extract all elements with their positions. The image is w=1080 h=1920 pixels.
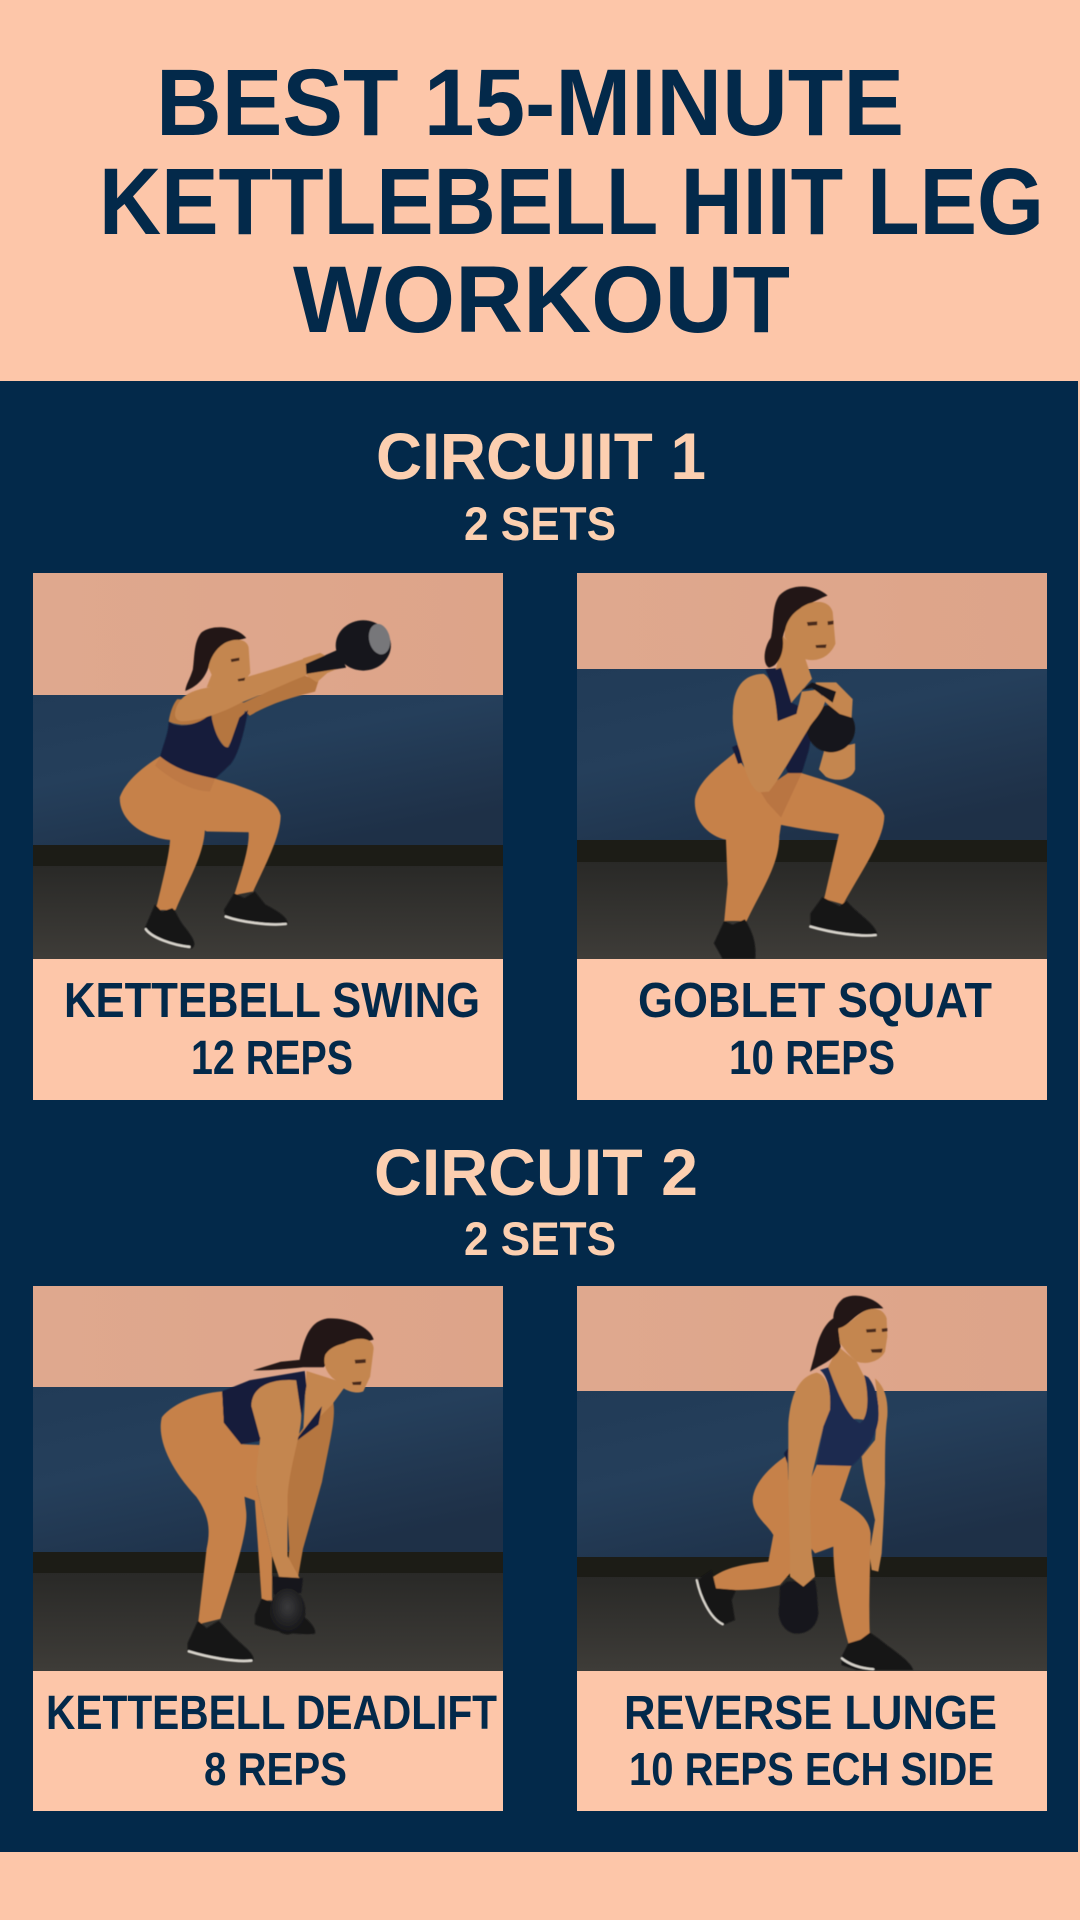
kettlebell: [270, 1576, 305, 1634]
title: BEST 15-MINUTE: [156, 50, 904, 156]
title: WORKOUT: [293, 247, 790, 353]
panel: reverse lunge: [577, 1286, 1047, 1811]
caption: kettlebell swing: [33, 959, 503, 1100]
heading: circuit 1: 2 SETS: [464, 498, 616, 551]
photo background: [33, 573, 503, 959]
photo background: [33, 1286, 503, 1671]
caption: kettlebell deadlift: KETTEBELL DEADLIFT: [46, 1687, 497, 1740]
caption: kettlebell deadlift: [33, 1671, 503, 1811]
heading: circuit 2: [374, 1135, 698, 1266]
panel: goblet squat: [577, 573, 1047, 1100]
navy main panel: [0, 381, 1078, 1852]
figure: woman in reverse lunge: [697, 1296, 913, 1670]
figure: woman swinging kettlebell: [120, 620, 393, 949]
caption: kettlebell swing: KETTEBELL SWING: [64, 974, 480, 1028]
panel: kettlebell deadlift: [33, 1286, 503, 1811]
figure: woman bending to kettlebell: [161, 1318, 374, 1662]
photo background: [577, 573, 1047, 959]
heading: circuit 1: [376, 419, 706, 551]
photo background: [577, 1286, 1047, 1671]
caption: reverse lunge: 10 REPS ECH SIDE: [629, 1743, 994, 1795]
caption: goblet squat: GOBLET SQUAT: [638, 974, 992, 1028]
figure: woman holding kettlebell at chest: [695, 586, 884, 959]
caption: goblet squat: 10 REPS: [729, 1032, 895, 1085]
kettlebell: [306, 620, 393, 674]
caption: kettlebell deadlift: 8 REPS: [204, 1743, 347, 1795]
caption: reverse lunge: [577, 1671, 1047, 1811]
kettlebell: [779, 1580, 818, 1634]
heading: circuit 1: CIRCUIIT 1: [376, 419, 706, 493]
caption: goblet squat: [577, 959, 1047, 1100]
caption: kettlebell swing: 12 REPS: [191, 1032, 353, 1085]
heading: circuit 2: 2 SETS: [464, 1213, 616, 1266]
heading: circuit 2: CIRCUIT 2: [374, 1135, 698, 1209]
caption: reverse lunge: REVERSE LUNGE: [624, 1687, 997, 1740]
panel: kettlebell swing: [33, 573, 503, 1100]
title: [99, 50, 1044, 353]
